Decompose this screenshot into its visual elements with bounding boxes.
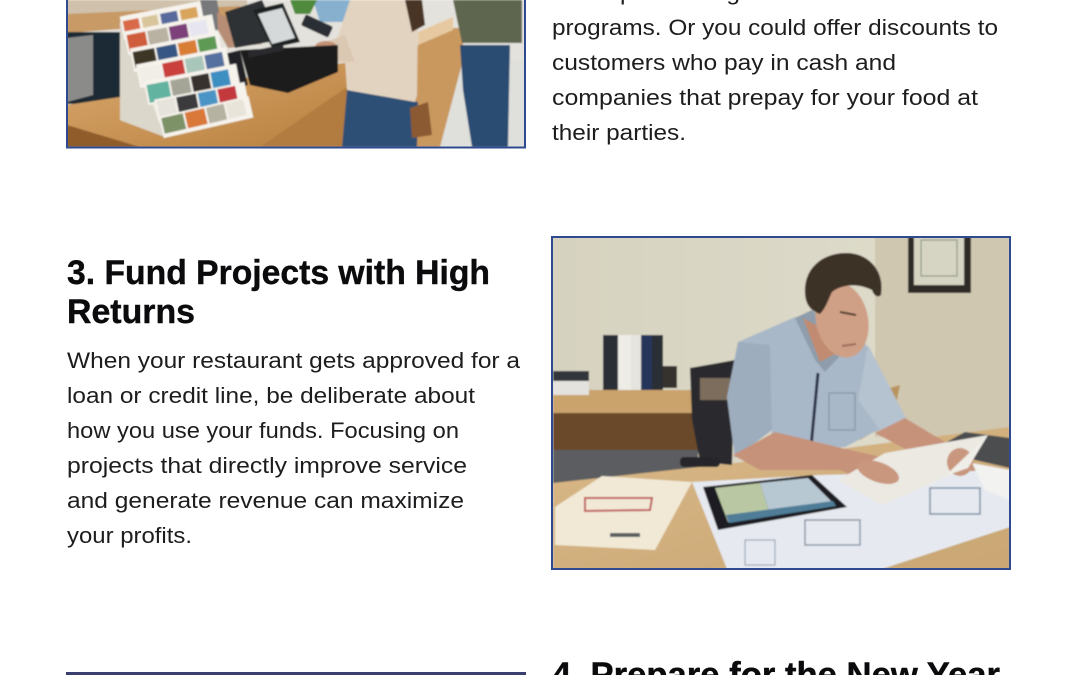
blueprint [692,470,1010,569]
photo: gift card display at restaurant counter [67,0,525,148]
laptop [945,432,1010,468]
folder [555,476,692,550]
desk [553,427,1010,569]
body text: gift card paragraph: their parties. [552,120,686,145]
shirt [727,316,880,448]
body text: use of funds paragraph: When your restaurant gets approved for a [67,348,521,373]
body text: use of funds paragraph: projects that directly improve service [67,453,467,478]
body text: use of funds paragraph: and generate revenue can maximize [67,488,464,513]
heading: 3. Fund Projects with High Returns: Returns [67,293,195,331]
chair [690,360,735,465]
body text: gift card paragraph: companies that prepay for your food at [552,85,978,110]
body text: use of funds paragraph [67,348,521,548]
photo: top edge of next section image [66,672,526,675]
tablet [703,475,847,530]
paper in hand [838,435,988,505]
body text: use of funds paragraph: how you use your funds. Focusing on [67,418,459,443]
arms [733,432,878,474]
body text: use of funds paragraph: your profits. [67,523,192,548]
heading: 3. Fund Projects with High Returns: 3. Fund Projects with High [67,254,490,292]
neck and face [803,318,835,362]
body text: gift card paragraph [552,0,998,145]
body text: use of funds paragraph: loan or credit line, be deliberate about [67,383,475,408]
heading: 3. Fund Projects with High Returns [67,254,490,331]
body text: gift card paragraph: programs. Or you could offer discounts to [552,15,998,40]
photo: man reviewing plans and finances at desk [552,237,1010,569]
gift card rack [119,21,162,127]
woman's jeans [342,90,418,147]
body text: gift card paragraph: customers who pay in cash and [552,50,896,75]
